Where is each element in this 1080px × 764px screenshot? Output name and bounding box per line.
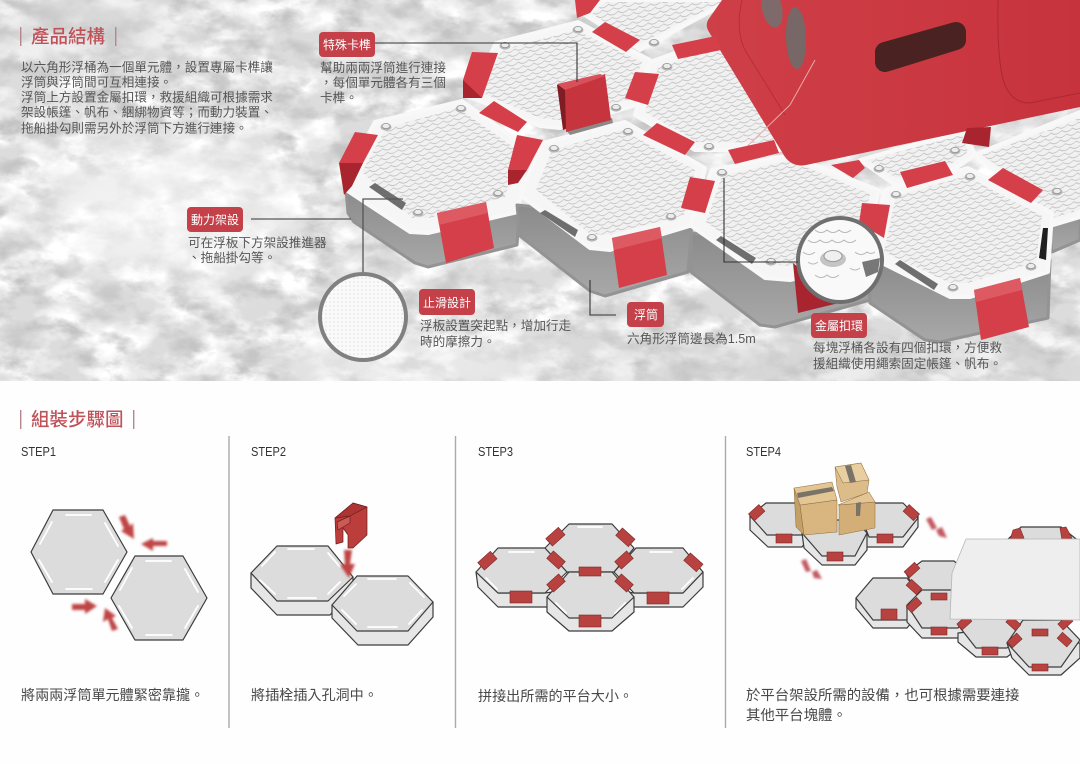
large platform: [856, 527, 1080, 675]
callout: anti-slip: [419, 289, 575, 349]
small platform: [748, 503, 920, 565]
callout: anti-slip: 浮板設置突起點，增加行走: [420, 318, 572, 333]
float: rear top: [585, 0, 732, 50]
leader line: special clip: [375, 43, 577, 82]
zoom circle: anti-slip texture: [320, 274, 406, 360]
callout: special clip: [319, 32, 449, 105]
tent: [707, 0, 1080, 165]
heading: product structure: 產品結構: [31, 26, 105, 47]
callout: power mount: [187, 207, 330, 265]
callout: float: 六角形浮筒邊長為1.5m: [627, 332, 756, 346]
panel: step 2: [251, 444, 433, 703]
slot: [716, 236, 756, 264]
callout: special clip: 特殊卡榫: [323, 37, 371, 52]
float: upper middle: [470, 22, 650, 128]
left hexagon: [251, 546, 353, 615]
step 3 label: STEP3: [478, 444, 513, 459]
float: far right front: [866, 168, 1052, 342]
step 3 caption: 拼接出所需的平台大小。: [478, 688, 633, 704]
callout: anti-slip: 時的摩擦力。: [420, 334, 496, 349]
callout: special clip: 幫助兩兩浮筒進行連接: [320, 60, 446, 75]
float: front centre: [517, 122, 705, 296]
text: product description: 架設帳篷、帆布、綑綁物資等；而動力裝置、: [21, 104, 273, 120]
panel: step 3: [476, 444, 703, 704]
step 4 label: STEP4: [746, 444, 781, 459]
callout: metal ring: 援組織使用繩索固定帳篷、帆布。: [813, 356, 1002, 371]
heading: assembly steps: 組裝步驟圖: [31, 409, 124, 430]
bolts: [380, 26, 1062, 292]
float: front left: [346, 101, 528, 267]
callout: anti-slip: 止滑設計: [423, 295, 471, 310]
step 1 label: STEP1: [21, 444, 56, 459]
cardboard boxes: [794, 463, 875, 535]
right hexagon: [332, 576, 433, 645]
step 1 caption: 將兩兩浮筒單元體緊密靠攏。: [21, 687, 204, 703]
panel: step 4: [746, 444, 1080, 724]
metal ring nut: [820, 251, 846, 267]
text: product description: 浮筒上方設置金屬扣環，救援組織可根據需求: [21, 90, 273, 104]
arrow down: [340, 550, 355, 578]
clips: [478, 527, 703, 627]
panel: step 1: [21, 444, 207, 703]
float: front right of centre: [690, 155, 878, 327]
callout: float: 浮筒: [634, 308, 658, 322]
text: product description: 拖船掛勾則需另外於浮筒下方進行連接。: [21, 120, 248, 136]
hexagon cluster: [476, 524, 703, 631]
hexagon A: [31, 510, 127, 594]
callout: special clip: 卡榫。: [320, 91, 358, 105]
tent door seam: [998, 0, 1080, 103]
step 4 caption: 於平台架設所需的設備，也可根據需要連接: [746, 687, 1019, 704]
callout: float: [627, 302, 756, 346]
leader line: float: [590, 280, 616, 315]
zoom circle: metal ring: [798, 218, 882, 302]
callout: power mount: 、拖船掛勾等。: [188, 250, 276, 265]
sea photo background: [0, 0, 1080, 391]
slot: [540, 210, 578, 237]
tent outline: [950, 539, 1080, 620]
text: product description: 浮筒與浮筒間可互相連接。: [21, 74, 172, 90]
tent vents: [758, 0, 786, 30]
slot: [895, 260, 938, 290]
leader line: metal ring: [724, 178, 798, 262]
callout: power mount: 動力架設: [191, 212, 239, 227]
callout: metal ring: 金屬扣環: [815, 318, 863, 333]
float: under tent: [860, 130, 975, 185]
callout: metal ring: [811, 313, 1005, 371]
enlarged scale marks: [803, 230, 875, 278]
red clip: [335, 503, 367, 548]
hexagon B: [111, 556, 207, 640]
callout: power mount: 可在浮板下方架設推進器: [188, 235, 327, 250]
arrows: [72, 515, 167, 631]
leader line: anti-slip: [363, 199, 403, 272]
small arrows: [801, 517, 947, 579]
step dividers: [229, 436, 726, 728]
special clip being inserted: [557, 74, 613, 135]
callout: special clip: ，每個單元體各有三個: [320, 75, 446, 90]
tent rope: [733, 60, 815, 160]
float: middle right: [635, 38, 810, 150]
step 2 caption: 將插栓插入孔洞中。: [251, 687, 378, 703]
dark notch: [862, 258, 880, 277]
step 2 label: STEP2: [251, 444, 286, 459]
tent seam left: [739, 0, 785, 115]
tent window: [885, 32, 956, 62]
text: product description: 以六角形浮桶為一個單元體，設置專屬卡榫讓: [21, 60, 273, 74]
callout: metal ring: 每塊浮桶各設有四個扣環，方便救: [813, 340, 1002, 355]
float: back right: [974, 112, 1080, 252]
slot right: [1039, 228, 1048, 260]
leader line: power mount: [251, 218, 351, 220]
step 4 caption: 其他平台塊體。: [746, 707, 847, 724]
red clips: [339, 0, 1043, 340]
slot: [369, 183, 406, 210]
